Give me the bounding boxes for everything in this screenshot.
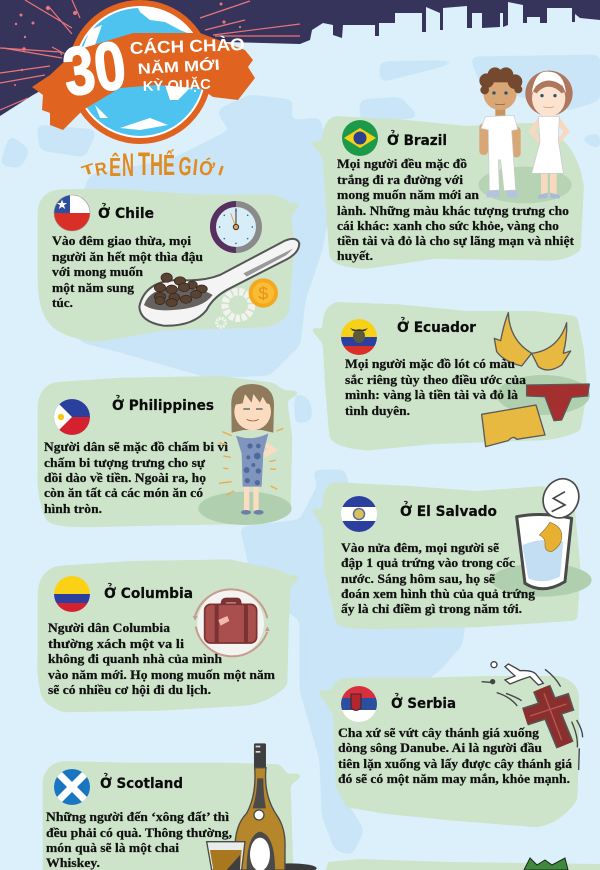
globe continents bbox=[83, 6, 193, 130]
body text bbox=[52, 233, 203, 310]
panel: Chile bbox=[38, 189, 302, 342]
panel: Scotland bbox=[43, 743, 317, 870]
panel: Brazil bbox=[310, 67, 583, 268]
heading: Ở Brazil bbox=[387, 130, 447, 149]
subtitle: Ế bbox=[163, 148, 175, 182]
body text: mình: vàng là tiền tài và đỏ là bbox=[345, 387, 519, 402]
body text: trắng đi ra đường với bbox=[337, 172, 463, 187]
boy bbox=[479, 67, 522, 197]
body text: Người dân Columbia bbox=[48, 620, 171, 635]
icon: cross splash bbox=[482, 662, 583, 770]
flag: Philippines bbox=[54, 399, 90, 435]
icon: whisky bottle and glass bbox=[207, 743, 317, 870]
panel: El Salvado bbox=[311, 473, 592, 628]
body text: Cha xứ sẽ vứt cây thánh giá xuống bbox=[338, 725, 540, 740]
icon: couple in white bbox=[478, 67, 573, 203]
body text bbox=[345, 356, 527, 418]
body text: với mong muốn bbox=[52, 264, 144, 279]
body text: tình duyên. bbox=[345, 403, 410, 418]
night sky with skyline bbox=[0, 0, 600, 116]
heading: Ở El Salvado bbox=[400, 501, 497, 520]
globe ring bbox=[68, 0, 212, 144]
body text: ấy là chỉ điềm gì trong năm tới. bbox=[341, 601, 522, 616]
body text: Whiskey. bbox=[46, 855, 100, 870]
icon: green plant bbox=[524, 858, 568, 870]
flag: Columbia bbox=[54, 576, 90, 612]
body text: Vào đêm giao thừa, mọi bbox=[52, 233, 191, 248]
icon: suitcase bbox=[193, 589, 270, 657]
card background bbox=[38, 377, 301, 527]
body text: Mọi người mặc đồ lót có màu bbox=[345, 356, 515, 371]
body text: còn ăn tất cả các món ăn có bbox=[44, 485, 203, 500]
body text: món quà sẽ là một chai bbox=[46, 840, 179, 855]
panel: Serbia bbox=[317, 662, 583, 827]
fireworks bbox=[0, 0, 300, 110]
body text: Người dân sẽ mặc đồ chấm bi vì bbox=[44, 439, 228, 454]
heading: Ở Chile bbox=[98, 203, 154, 222]
body text bbox=[338, 725, 573, 786]
body text: hình tròn. bbox=[44, 501, 102, 516]
body text: lành. Những màu khác tượng trưng cho bbox=[337, 203, 569, 218]
body text: tiên lặn xuống và lấy được cây thánh giá bbox=[338, 756, 573, 771]
card background bbox=[317, 677, 578, 827]
subtitle bbox=[79, 146, 226, 183]
logo: globe with ribbon bbox=[32, 0, 255, 144]
subtitle: I bbox=[191, 154, 199, 180]
body text: chấm bi tượng trưng cho sự bbox=[44, 455, 205, 470]
body text bbox=[337, 156, 575, 263]
body text bbox=[46, 809, 232, 870]
subtitle: I bbox=[216, 162, 226, 179]
firework dots bbox=[14, 2, 241, 86]
icon: egg in glass bbox=[492, 473, 592, 597]
flag: Brazil bbox=[342, 120, 378, 156]
body text: vào năm mới. Họ mong muốn một năm bbox=[48, 667, 275, 682]
heading: Ở Columbia bbox=[104, 583, 193, 602]
subtitle: R bbox=[93, 158, 109, 180]
body text: đoán xem hình thù của quả trứng bbox=[341, 586, 536, 601]
flag: Scotland bbox=[54, 769, 90, 805]
body text: dòng sông Danube. Ai là người đầu bbox=[338, 740, 542, 755]
heading: Ở Philippines bbox=[112, 395, 214, 414]
body text: một năm sung bbox=[52, 280, 135, 295]
subtitle: Ớ bbox=[197, 155, 217, 181]
body text: không đi quanh nhà của mình bbox=[48, 651, 223, 666]
card background bbox=[326, 859, 600, 870]
girl bbox=[525, 71, 573, 198]
body text: tiền tài và đỏ là cho sự lãng mạn và nhiệt bbox=[337, 233, 575, 248]
subtitle: G bbox=[178, 151, 193, 181]
heading: Ở Ecuador bbox=[397, 317, 476, 336]
card background bbox=[310, 303, 587, 450]
ribbon number: 30 bbox=[59, 27, 130, 111]
body text: sắc riêng tùy theo điều ước của bbox=[345, 372, 527, 387]
body text bbox=[44, 439, 228, 516]
globe bbox=[74, 6, 206, 138]
body text: mong muốn năm mới an bbox=[337, 187, 480, 202]
panel: Philippines bbox=[38, 377, 301, 527]
panel: Columbia bbox=[38, 560, 302, 712]
body text: sẽ có nhiều cơ hội đi du lịch. bbox=[48, 682, 211, 697]
ribbon line 3: KỲ QUẶC bbox=[143, 75, 211, 94]
heading: Ở Serbia bbox=[391, 693, 456, 712]
subtitle: H bbox=[150, 147, 163, 182]
body text: đó sẽ có một năm may mắn, khỏe mạnh. bbox=[338, 771, 570, 786]
flag: El Salvador bbox=[341, 496, 377, 532]
body text: đều phải có quà. Thông thường, bbox=[46, 825, 232, 840]
panel: next card, cropped at bottom bbox=[326, 858, 600, 870]
subtitle: T bbox=[79, 160, 97, 179]
body text: huyết. bbox=[337, 248, 373, 263]
body text: dồi dào về tiền. Ngoài ra, họ bbox=[44, 470, 206, 485]
body text bbox=[341, 540, 536, 616]
card background bbox=[38, 189, 302, 342]
icon: woman in polka dot dress bbox=[198, 384, 292, 525]
body text: Vào nửa đêm, mọi người sẽ bbox=[341, 540, 499, 555]
heading: Ở Scotland bbox=[100, 773, 183, 792]
card background bbox=[310, 117, 583, 268]
ribbon line 1: CÁCH CHÀO bbox=[129, 35, 245, 58]
body text: túc. bbox=[52, 295, 73, 310]
flag: Chile bbox=[54, 195, 90, 231]
body text: nước. Sáng hôm sau, họ sẽ bbox=[341, 571, 495, 586]
body text bbox=[48, 620, 275, 697]
subtitle: Ê bbox=[109, 152, 121, 182]
body text: Những người đến ‘xông đất’ thì bbox=[46, 809, 229, 824]
subtitle: N bbox=[122, 147, 134, 183]
panel: Ecuador bbox=[310, 303, 590, 450]
body text: người ăn hết một thìa đậu bbox=[52, 249, 203, 264]
icon: clock, spoon of beans, coin and gears: $ bbox=[258, 283, 268, 303]
flag: Serbia bbox=[341, 686, 377, 722]
body text: Mọi người đều mặc đồ bbox=[337, 156, 467, 171]
icon: clock, spoon of beans, coin and gears bbox=[139, 201, 299, 327]
flag: Ecuador bbox=[341, 319, 377, 355]
body text: cái khác: xanh cho sức khỏe, vàng cho bbox=[337, 218, 559, 233]
body text: đập 1 quả trứng vào trong cốc bbox=[341, 555, 515, 570]
ribbon bbox=[32, 33, 255, 130]
subtitle: T bbox=[138, 146, 150, 182]
card background bbox=[311, 483, 580, 628]
ribbon line 2: NĂM MỚI bbox=[137, 56, 220, 78]
card background bbox=[38, 560, 302, 712]
body text: thường xách một va li bbox=[48, 636, 184, 651]
icon: underwear bbox=[482, 313, 590, 447]
card background bbox=[43, 762, 303, 870]
